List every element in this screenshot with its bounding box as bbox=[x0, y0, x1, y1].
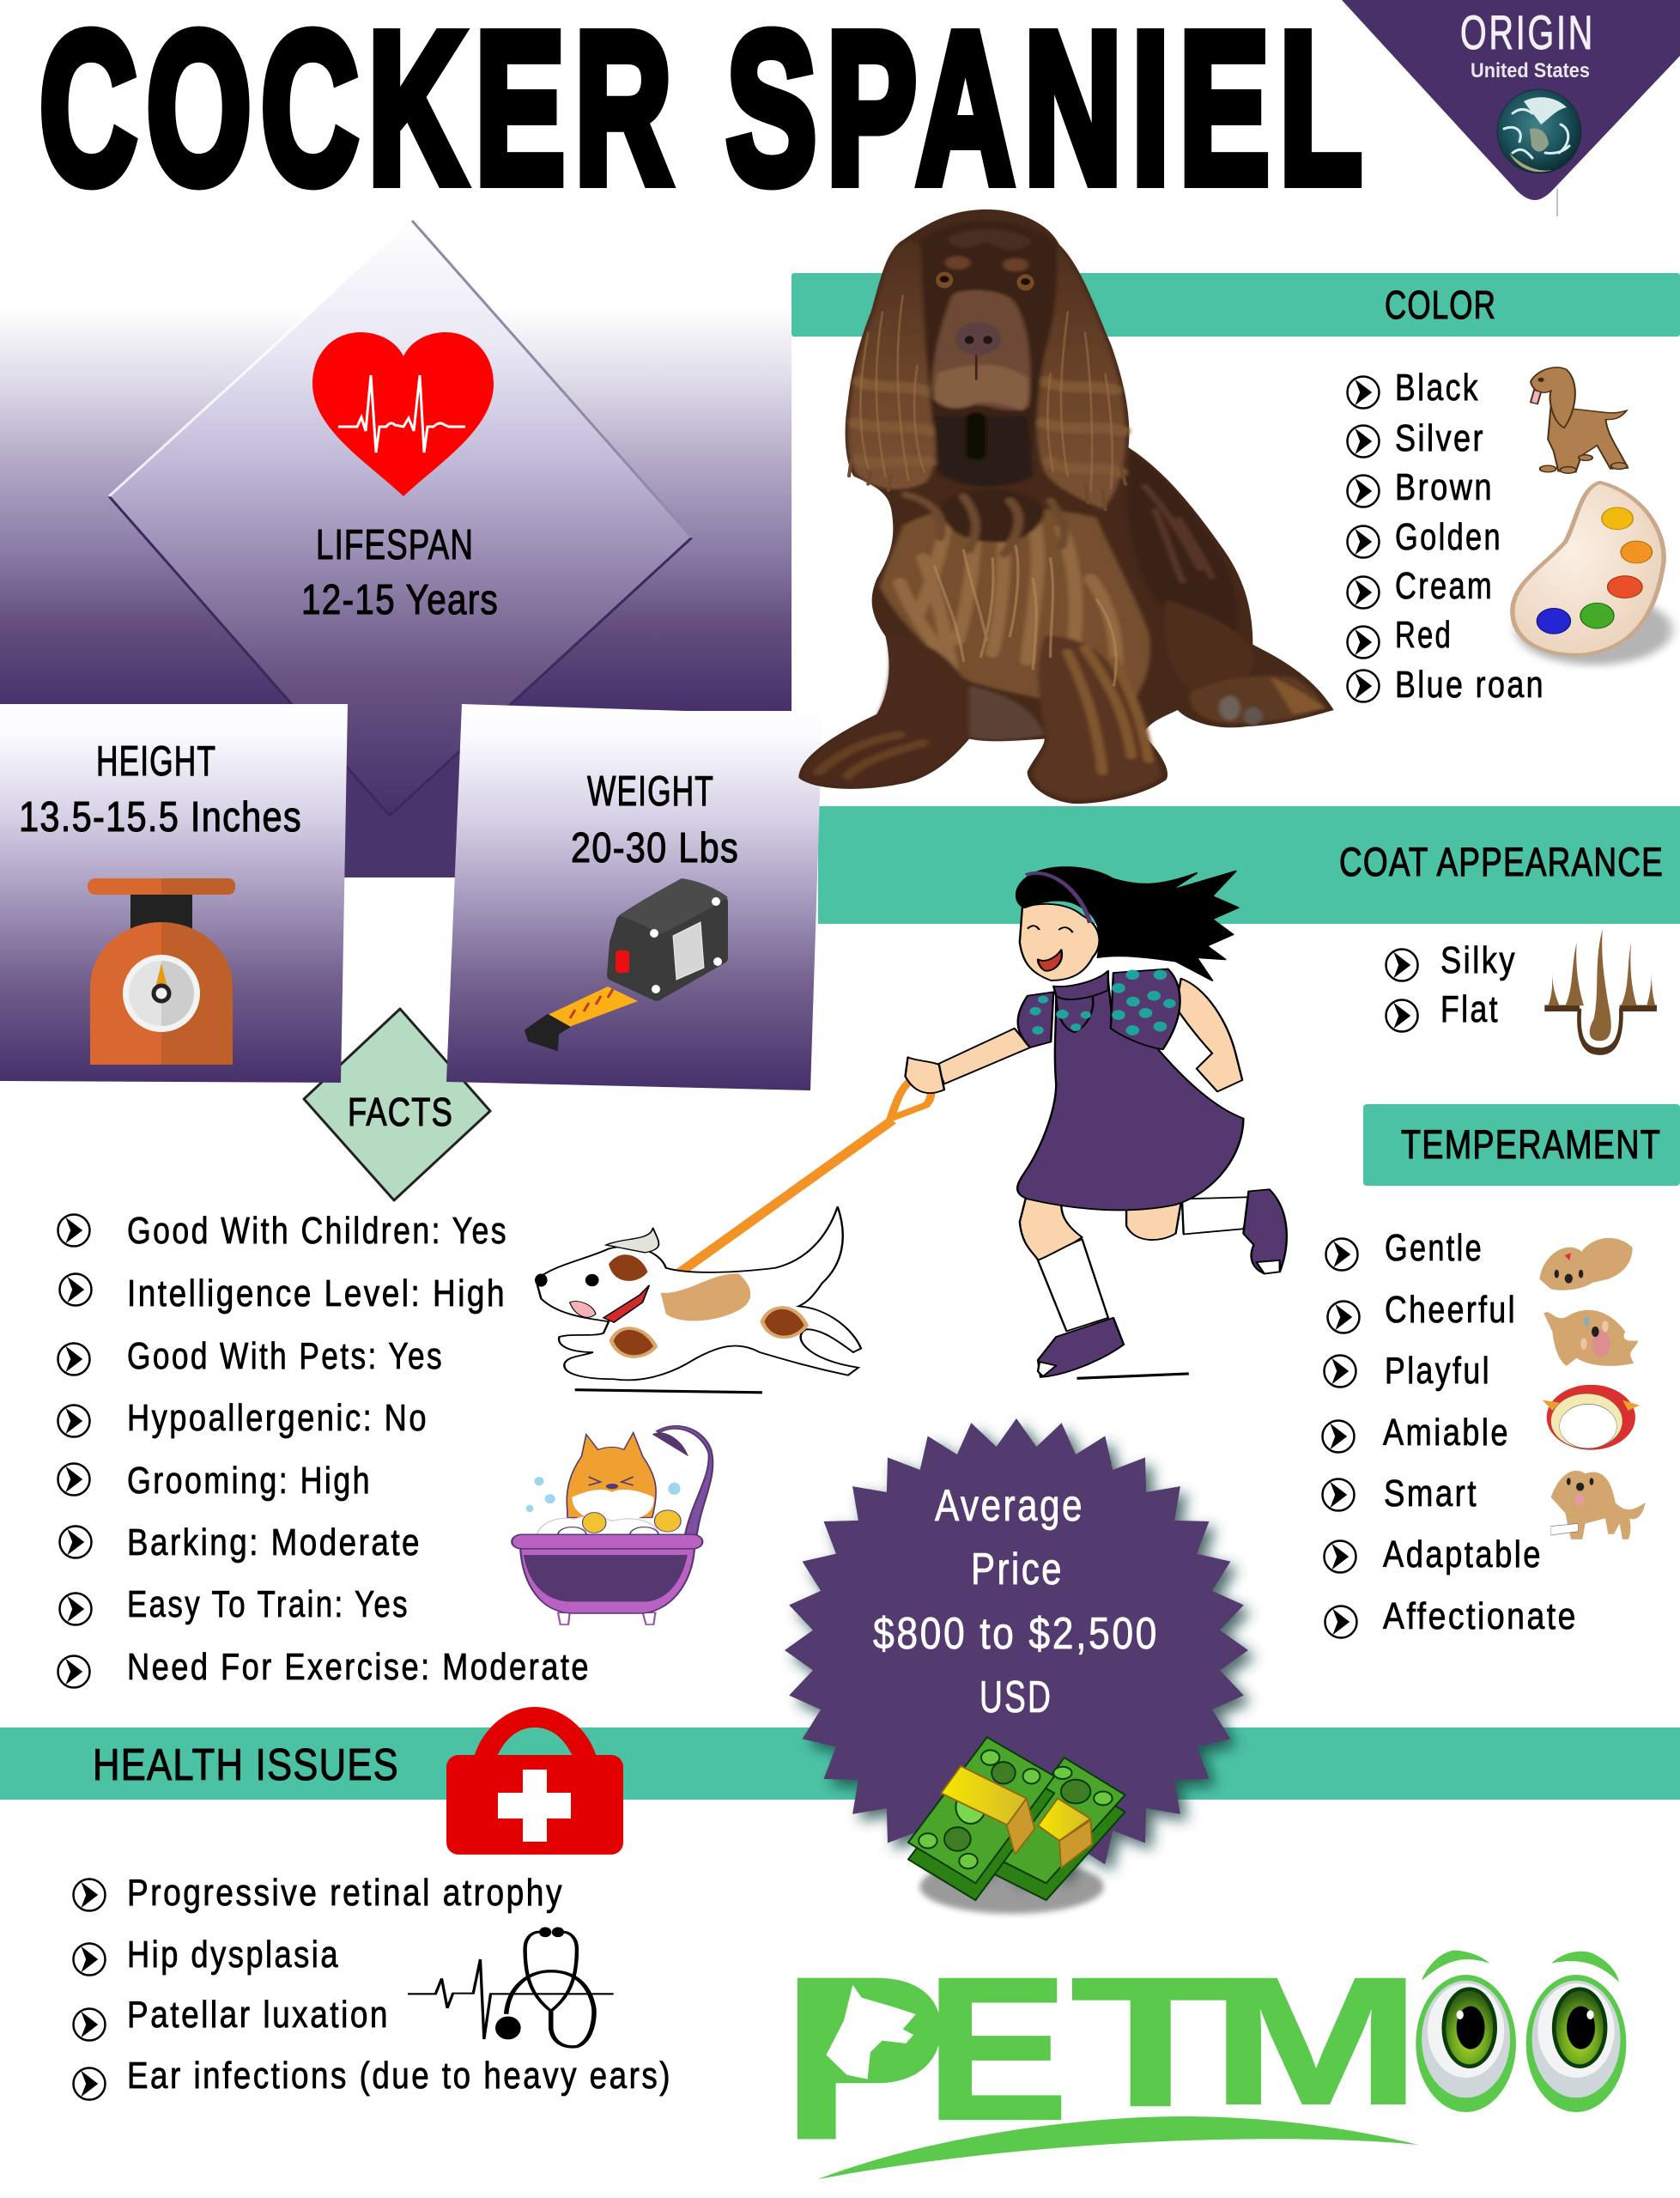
text: good with pets: Good With Pets: Yes bbox=[127, 1335, 444, 1377]
panel: weight bbox=[446, 704, 822, 1090]
text: Adaptable: Adaptable bbox=[1383, 1533, 1543, 1576]
band: coat appearance bbox=[818, 806, 1680, 924]
text: Cheerful: Cheerful bbox=[1385, 1289, 1517, 1331]
text: Black: Black bbox=[1395, 367, 1480, 409]
text: lifespan value: 12-15 Years bbox=[301, 577, 499, 623]
text: Amiable: Amiable bbox=[1383, 1412, 1510, 1454]
icon: puppy with bone bbox=[1551, 1471, 1646, 1539]
text: exercise: Need For Exercise: Moderate bbox=[127, 1646, 591, 1688]
text: Silver: Silver bbox=[1395, 417, 1485, 459]
diamond: lifespan bbox=[109, 221, 692, 816]
icon: hair follicle bbox=[1544, 929, 1657, 1052]
text: good with children: Good With Children: Yes bbox=[127, 1210, 508, 1252]
text: origin value: United States bbox=[1471, 59, 1590, 82]
text: ear infections: Ear infections (due to heavy ears) bbox=[127, 2055, 672, 2097]
panel: height bbox=[0, 704, 348, 1083]
illustration: girl walking dog bbox=[535, 867, 1287, 1393]
text: hip dysplasia: Hip dysplasia bbox=[127, 1934, 340, 1976]
icon: running girl bbox=[905, 867, 1287, 1378]
icon: money stacks bbox=[908, 1737, 1125, 1914]
text: PRA: Progressive retinal atrophy bbox=[127, 1872, 564, 1914]
text: Red: Red bbox=[1395, 614, 1453, 656]
list: temperament bbox=[1322, 1227, 1578, 1638]
text: Blue roan: Blue roan bbox=[1395, 664, 1545, 706]
text: price range: $800 to $2,500 bbox=[873, 1609, 1159, 1659]
text: grooming: Grooming: High bbox=[127, 1460, 372, 1502]
panel: gradient backdrop bbox=[0, 266, 791, 877]
text: Gentle: Gentle bbox=[1385, 1227, 1483, 1269]
text: patellar luxation: Patellar luxation bbox=[127, 1994, 390, 2036]
icon: heart with ECG bbox=[312, 332, 494, 496]
letter E: E bbox=[925, 1934, 1069, 2163]
list: facts bbox=[58, 1210, 591, 1688]
icon: measuring tape bbox=[525, 878, 728, 1050]
band: health issues bbox=[0, 1727, 1680, 1800]
text: hypoallergenic: Hypoallergenic: No bbox=[127, 1397, 428, 1439]
text: color heading: COLOR bbox=[1385, 282, 1496, 327]
band: color bbox=[791, 273, 1680, 337]
icon: running dog bbox=[535, 1206, 861, 1393]
text: facts heading: FACTS bbox=[348, 1090, 453, 1134]
icon: small brown dog bbox=[1531, 367, 1628, 473]
text: Affectionate: Affectionate bbox=[1383, 1595, 1578, 1637]
band: temperament bbox=[1363, 1104, 1680, 1186]
text: Cream: Cream bbox=[1395, 565, 1494, 607]
icon: first aid kit bbox=[446, 1707, 623, 1855]
text: origin heading: ORIGIN bbox=[1460, 5, 1595, 59]
text: height heading: HEIGHT bbox=[96, 738, 216, 785]
letter P: P bbox=[782, 1930, 948, 2188]
icon: leash bbox=[658, 1074, 931, 1288]
list: health issues bbox=[74, 1872, 672, 2100]
text: Brown: Brown bbox=[1395, 466, 1494, 508]
diamond: facts bbox=[304, 1009, 490, 1200]
badge: average price bbox=[688, 1322, 1344, 1978]
list: colors bbox=[1348, 367, 1545, 706]
photo: cocker spaniel bbox=[798, 209, 1334, 804]
text: Flat: Flat bbox=[1440, 988, 1500, 1030]
icon: globe bbox=[1497, 89, 1581, 173]
icon: logo artwork bbox=[817, 1951, 1626, 2179]
text: average: Average bbox=[935, 1481, 1084, 1531]
icon: dog bed bbox=[1543, 1385, 1640, 1450]
icon: sleeping puppy bbox=[1539, 1238, 1633, 1290]
text: Playful: Playful bbox=[1385, 1350, 1491, 1392]
icon: paint palette bbox=[1513, 483, 1672, 665]
letter T: T bbox=[1070, 1940, 1230, 2144]
starburst bbox=[688, 1322, 1344, 1978]
list: coat bbox=[1386, 939, 1517, 1032]
text: Smart: Smart bbox=[1384, 1472, 1478, 1515]
text: lifespan heading: LIFESPAN bbox=[316, 522, 474, 568]
icon: dog in bathtub bbox=[512, 1426, 713, 1624]
text: weight value: 20-30 Lbs bbox=[571, 825, 739, 871]
text: price: Price bbox=[971, 1545, 1064, 1594]
icon: puppies bbox=[1539, 1238, 1646, 1539]
text: Golden: Golden bbox=[1395, 516, 1502, 558]
text: barking: Barking: Moderate bbox=[127, 1521, 422, 1563]
text: easy to train: Easy To Train: Yes bbox=[127, 1583, 409, 1625]
text: weight heading: WEIGHT bbox=[587, 768, 714, 815]
text: intelligence level: Intelligence Level: High bbox=[127, 1272, 506, 1315]
icon: happy puppy bbox=[1544, 1310, 1638, 1366]
icon: stethoscope bbox=[408, 1928, 614, 2047]
icon: weighing scale bbox=[88, 878, 235, 1065]
logo: petmoo bbox=[782, 1930, 1626, 2188]
text: Silky: Silky bbox=[1440, 939, 1517, 981]
letter M: M bbox=[1210, 1940, 1422, 2142]
text: height value: 13.5-15.5 Inches bbox=[19, 794, 302, 841]
panel: origin bbox=[1342, 0, 1680, 216]
text: USD: USD bbox=[979, 1673, 1052, 1722]
text: health heading: HEALTH ISSUES bbox=[93, 1740, 399, 1790]
